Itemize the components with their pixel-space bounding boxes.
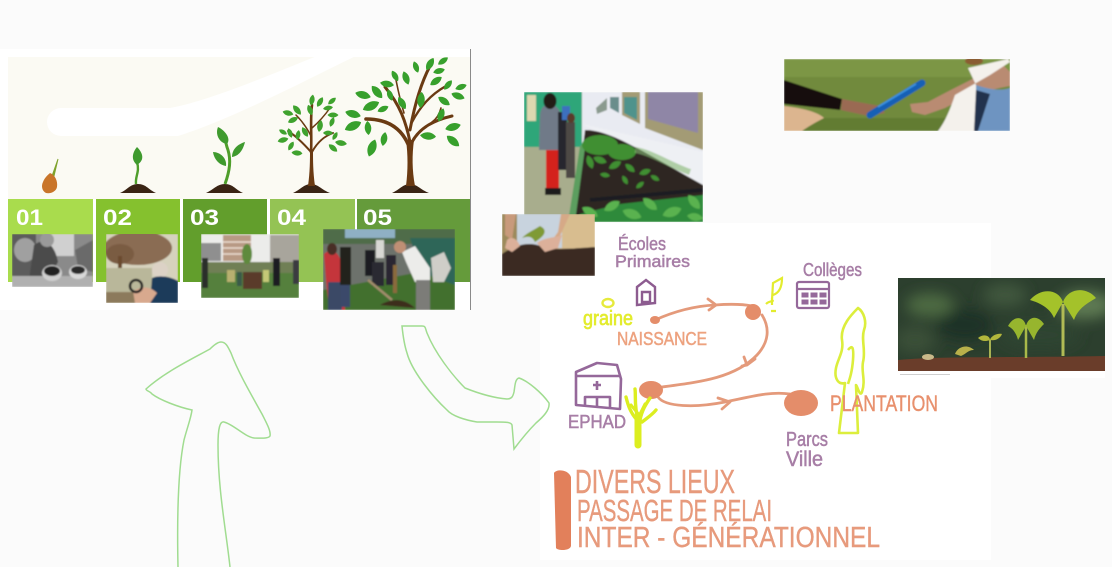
label: Parcs Ville — [786, 429, 828, 471]
label: Parcs Ville: Ville — [786, 448, 823, 471]
icon: small tree — [277, 94, 347, 193]
label: Écoles Primaires: Primaires — [615, 252, 690, 271]
icon: seed circle — [602, 299, 614, 307]
text block: summary: DIVERS LIEUX — [575, 463, 735, 500]
step 03: 03 — [190, 205, 219, 230]
arrow: up outline — [146, 342, 270, 567]
step 03 — [183, 199, 267, 282]
text block: summary: PASSAGE DE RELAI — [577, 493, 772, 528]
label: Parcs Ville: Parcs — [786, 429, 828, 451]
label: Collèges: Collèges — [803, 260, 862, 280]
icon: sprout with one leaf — [120, 147, 156, 193]
label: NAISSANCE: NAISSANCE — [617, 329, 707, 349]
icon: small yellow tree — [626, 389, 656, 445]
arrow: curved right outline — [402, 326, 549, 449]
icon: yellow tree outline — [835, 308, 865, 433]
label: Écoles Primaires: Écoles — [618, 234, 666, 254]
text block: summary: INTER - GÉNÉRATIONNEL — [577, 521, 880, 554]
photo: hands planting in soil — [502, 214, 595, 276]
step 04 — [270, 199, 355, 282]
icon: small sprout — [766, 278, 782, 311]
photo: hands filling pots (greyscale) — [12, 233, 93, 287]
icon: school house — [637, 280, 655, 305]
icon: seed — [42, 159, 58, 193]
step 02: 02 — [103, 205, 132, 230]
step 04: 04 — [277, 205, 307, 230]
route: orange relay line — [655, 299, 790, 409]
label: Écoles Primaires — [615, 234, 690, 271]
label: PLANTATION: PLANTATION — [830, 391, 938, 416]
step 01 — [8, 199, 93, 282]
icon: young plant — [206, 127, 245, 193]
route stops — [639, 304, 818, 416]
step 05 — [357, 199, 470, 282]
step 05: 05 — [363, 205, 392, 230]
icon: large tree — [343, 55, 468, 193]
text block: summary — [575, 463, 880, 554]
marker bar — [554, 470, 571, 550]
icon: college building — [797, 282, 829, 308]
photo: relay baton handover — [784, 57, 1010, 131]
photo: elderly woman under a tree — [104, 231, 178, 303]
photo: seedlings growing in soil — [895, 278, 1112, 378]
photo: students planting a tree — [323, 229, 455, 310]
panel: growth timeline — [0, 49, 471, 310]
icon: EPHAD building — [576, 363, 621, 409]
label: EPHAD: EPHAD — [568, 412, 626, 432]
photo: group planting near buildings — [201, 234, 299, 298]
step 01: 01 — [16, 205, 43, 230]
step 02 — [96, 199, 180, 282]
panel: hand-drawn diagram — [540, 223, 991, 560]
label: graine: graine — [583, 308, 633, 330]
photo: classroom seedlings — [524, 92, 704, 222]
